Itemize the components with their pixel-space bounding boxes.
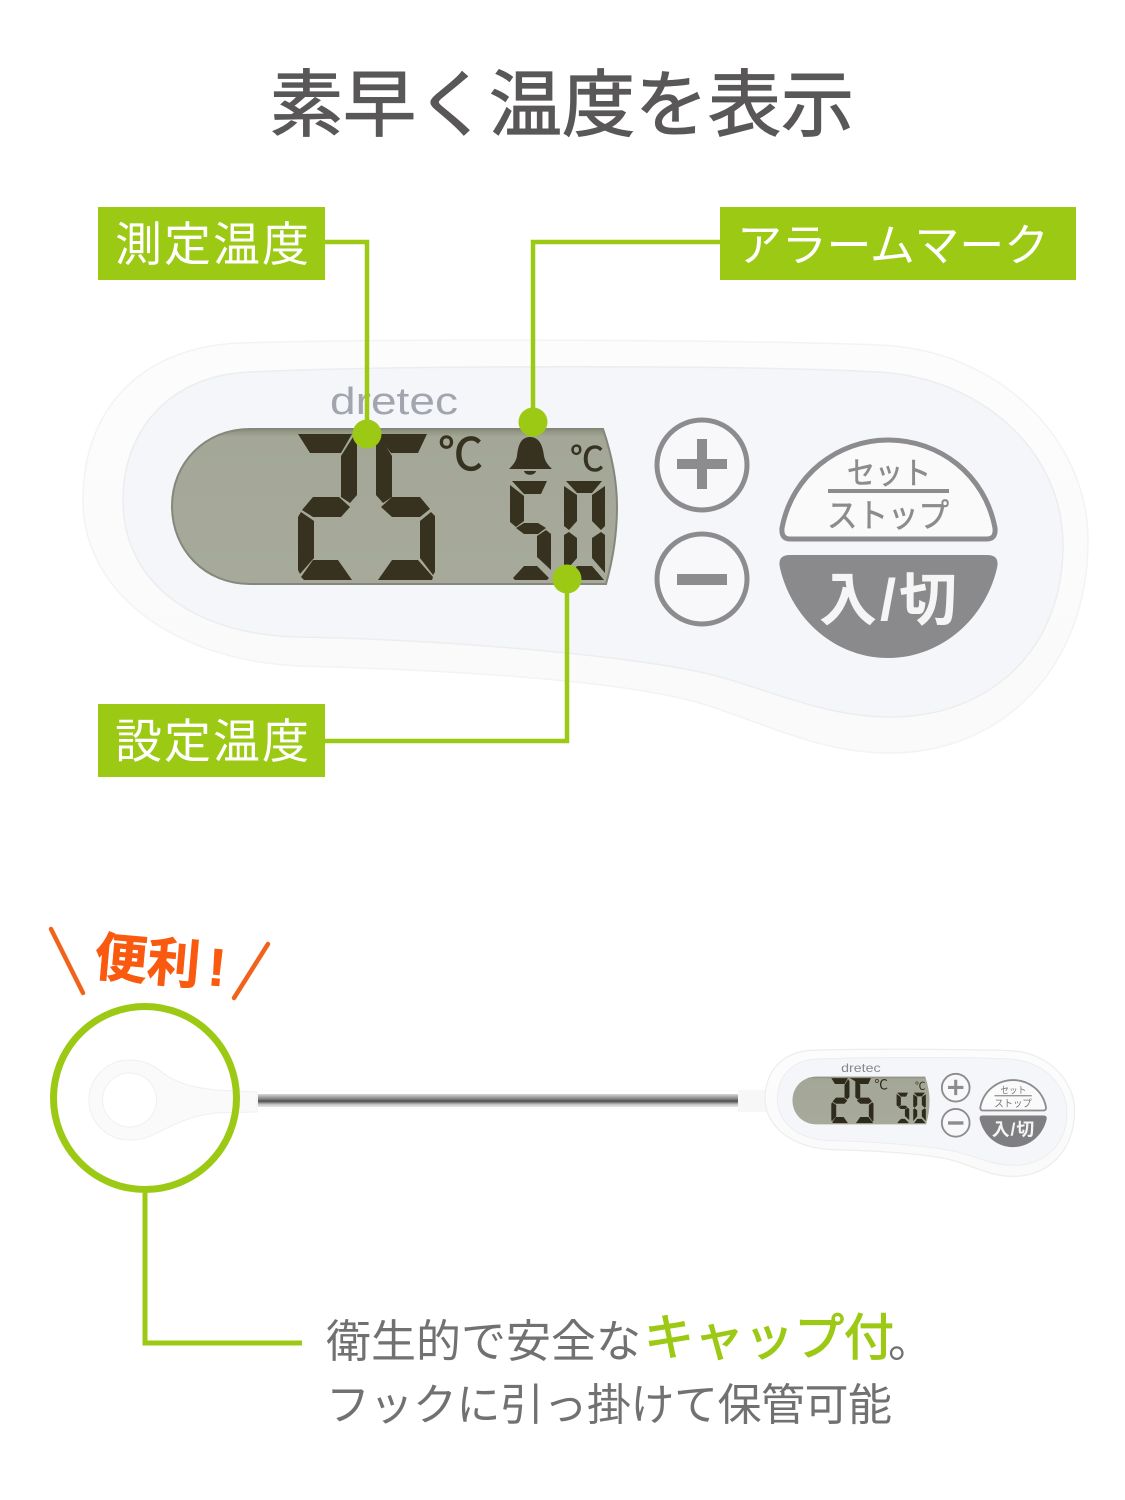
set/stop button: ストップ [827,497,949,534]
callout: set temperature: 設定温度 [115,715,309,768]
small LCD screen [792,1077,930,1124]
small brand logo: dretec [841,1062,881,1075]
zoom circle and leader line [54,1006,302,1343]
cap with hanging loop [89,1060,257,1140]
callout: measured temperature [98,207,382,448]
caption line 1: 衛生的で安全な [326,1316,641,1367]
small device face [777,1057,1067,1165]
small power button: 入/切 [992,1119,1034,1139]
callout: measured temperature: 測定温度 [115,218,309,271]
power button [779,555,998,658]
callout: set temperature [98,564,582,777]
LCD reading: 25 [298,434,435,580]
callout: alarm mark: アラームマーク [737,220,1049,271]
icon: alarm bell [509,437,552,475]
minus button [657,534,747,624]
small set/stop button: ストップ [994,1098,1032,1110]
caption line 1: 。 [888,1316,933,1367]
device face [123,367,1063,717]
LCD screen [172,429,617,584]
plus button [657,420,747,510]
thermometer: full view [738,1049,1075,1176]
small LCD units: ℃ [915,1082,926,1093]
caption text [326,1310,933,1430]
LCD reading: 50 [510,481,605,580]
small LCD units: ℃ [874,1077,888,1092]
set/stop button: セット [847,456,931,491]
LCD unit large: ℃ [438,429,483,480]
metal probe rod [258,1094,740,1107]
LCD unit small: ℃ [570,441,604,479]
small device body [765,1049,1075,1176]
small power button [980,1115,1047,1147]
device body outer [83,340,1088,753]
caption line 1: キャップ付 [644,1310,894,1366]
caption line 2: フックに引っ掛けて保管可能 [326,1381,892,1430]
collar [738,1090,778,1112]
small minus button [942,1109,970,1137]
small plus button [942,1074,970,1102]
small LCD reading: 50 [897,1093,926,1123]
small LCD units [874,1077,926,1093]
convenient badge: 便利! [92,928,228,998]
small set/stop button: セット [1000,1086,1026,1097]
power button: 入/切 [819,568,957,633]
small LCD reading: 25 [831,1078,873,1123]
title: 素早く温度を表示 [270,65,854,146]
callout: alarm mark [518,207,1076,436]
convenient badge [51,928,268,998]
small set/stop button [980,1080,1046,1111]
thermometer: large close-up [83,340,1088,753]
brand logo: dretec [330,381,458,423]
set/stop button [782,440,995,539]
